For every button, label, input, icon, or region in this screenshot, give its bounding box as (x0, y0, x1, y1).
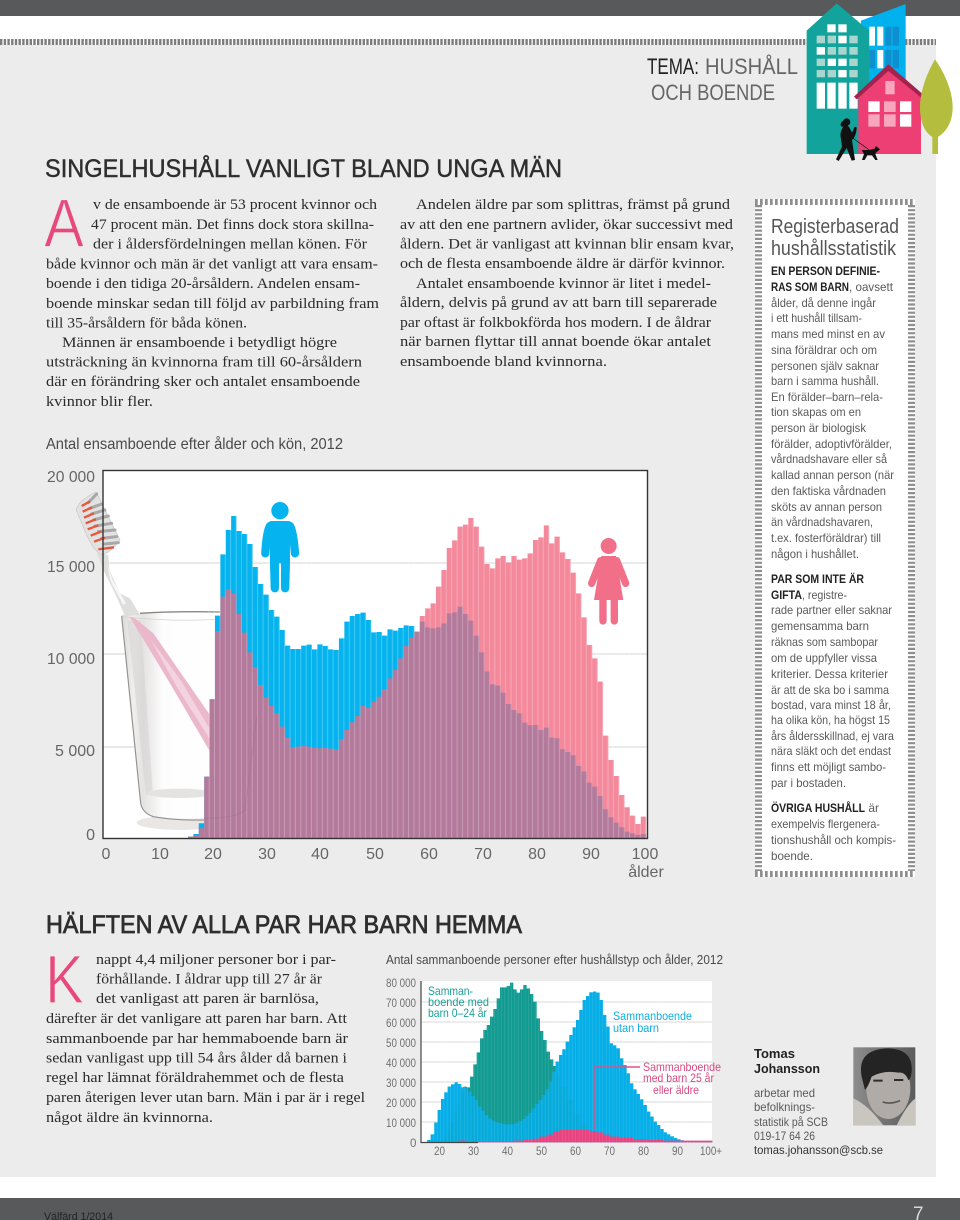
y axis labels: 15 000 (47, 559, 95, 576)
definition: barn: En förälder–barn–rela- (771, 390, 883, 404)
illustration: toothbrush (76, 492, 140, 616)
y axis labels: 5 000 (55, 743, 95, 760)
x axis labels chart 2: 90 (672, 1146, 683, 1158)
x axis labels: 60 (420, 846, 438, 863)
annotation: barn 25 år eller äldre (643, 1060, 721, 1097)
definition: övriga hushåll (771, 801, 896, 863)
author details: tomas.johansson@scb.se (754, 1143, 883, 1157)
definition: barn: någon i hushållet. (771, 547, 859, 561)
definition: par: rade partner eller saknar (771, 603, 892, 617)
footer (44, 1204, 924, 1220)
text block: second article: regel har lämnat föräldrahemmet och de flesta (46, 1070, 344, 1086)
x axis labels chart 2: 60 (570, 1146, 581, 1158)
author name: Tomas (754, 1046, 795, 1061)
panel: Registerbaserad hushållsstatistik (755, 199, 915, 877)
x axis labels chart 2: 20 (434, 1146, 445, 1158)
chart title: ensamboende: Antal ensamboende efter ålder och kön, 2012 (46, 435, 343, 453)
x axis labels: 50 (366, 846, 384, 863)
definition: barn: kallad annan person (när (771, 468, 894, 482)
text block: right column: ensamboende bland kvinnorna. (400, 354, 607, 370)
definition: par: finns ett möjligt sambo- (771, 760, 886, 774)
illustration: houses, tree and woman walking a dog (807, 3, 953, 161)
text block: intro left column: v de ensamboende är 53 procent kvinnor och (93, 197, 378, 213)
series: utan barn (427, 992, 712, 1142)
definition: övriga hushåll: boende. (771, 849, 813, 863)
definition: par: , registre- (802, 588, 847, 602)
definition: par: PAR SOM INTE ÄR (771, 573, 865, 586)
definition: övriga hushåll: exempelvis flergenera- (771, 817, 880, 831)
text block: intro left column: Männen är ensamboende i betydligt högre (62, 335, 337, 351)
text block: intro left column: kvinnor blir fler. (46, 394, 153, 410)
icon: woman with dog (836, 118, 880, 161)
x axis labels chart 2 (434, 1146, 722, 1158)
annotation: utan barn: utan barn (613, 1021, 659, 1035)
text block: intro left column (44, 185, 379, 410)
definition: barn: mans med minst en av (771, 327, 885, 341)
text block: right column: Andelen äldre par som splittras, främst på grund (416, 197, 731, 213)
series: barn 0–24 år (443, 983, 607, 1142)
x axis labels: 100 (632, 846, 658, 863)
definition: par: GIFTA (771, 590, 802, 602)
annotation: barn 0–24 år: Samman- (428, 984, 473, 998)
text block: right column (400, 197, 734, 370)
bars: men blue (188, 516, 414, 838)
definition: barn: t.ex. fosterföräldrar) till (771, 531, 881, 545)
text block: second article: förhållande. I åldrar upp till 27 år är (96, 972, 322, 988)
x axis labels chart 2: 80 (638, 1146, 649, 1158)
y axis labels chart 2: 80 000 (386, 978, 416, 990)
drop cap A: A (44, 185, 84, 262)
author details: 019-17 64 26 (754, 1129, 815, 1143)
x axis labels chart 2: 100+ (700, 1146, 722, 1158)
definition: par: är att de ska bo i samma (771, 683, 889, 697)
text block: intro left column: till 35-årsåldern för båda könen. (46, 316, 247, 332)
definition: barn (771, 266, 894, 561)
author name: Johansson (754, 1061, 820, 1076)
x axis labels: 30 (258, 846, 276, 863)
y axis labels (47, 469, 95, 844)
bars: women pink (414, 518, 646, 838)
definition: barn: personen själv saknar (771, 359, 879, 373)
author details: statistik på SCB (754, 1115, 828, 1129)
y axis labels chart 2: 10 000 (386, 1118, 416, 1130)
annotation: barn 0–24 år: boende med (428, 995, 489, 1009)
definition: övriga hushåll: ÖVRIGA HUSHÅLL (771, 802, 865, 815)
series: barn 25 år eller äldre (458, 1129, 712, 1142)
chart title: sammanboende: Antal sammanboende personer efter hushållstyp och ålder, 2012 (386, 952, 723, 967)
definition: barn: än vårdnadshavaren, (771, 515, 873, 529)
definition: par: par i bostaden. (771, 776, 846, 790)
y axis labels chart 2: 20 000 (386, 1098, 416, 1110)
definition: barn: den faktiska vårdnaden (771, 484, 886, 498)
author details: arbetar med (754, 1086, 815, 1100)
icon: tree (920, 59, 953, 154)
author block (754, 1046, 915, 1157)
x axis labels chart 2: 30 (468, 1146, 479, 1158)
panel title: Registerbaserad (771, 216, 899, 238)
panel title: hushållsstatistik (771, 238, 897, 260)
definition: par: bostad, vara minst 18 år, (771, 698, 891, 712)
text block: second article: paren återigen lever utan barn. Män i par är i regel (46, 1090, 365, 1106)
x axis labels: 90 (582, 846, 600, 863)
definition: barn: RAS SOM BARN (771, 282, 849, 294)
annotation: barn 0–24 år (428, 984, 489, 1020)
x axis labels chart 2: 50 (536, 1146, 547, 1158)
x axis labels: 40 (311, 846, 329, 863)
text block: second article: därefter är det vanligare att paren har barn. Att (46, 1011, 348, 1027)
annotation: barn 25 år eller äldre: Sammanboende (643, 1060, 721, 1074)
y axis labels chart 2 (386, 978, 416, 1150)
annotation: barn 25 år eller äldre: med barn 25 år (643, 1071, 714, 1085)
area bar chart: sammanboende efter hushållstyp och ålder (421, 981, 721, 1142)
section label: Tema: TEMA: (647, 54, 699, 79)
text block: intro left column: der i åldersfördelningen mellan könen. För (93, 236, 367, 252)
definition: barn: EN PERSON DEFINIE- (771, 266, 880, 278)
text block: second article: det vanligast att paren är barnlösa, (96, 991, 319, 1007)
definition: par: års åldersskillnad, ej vara (771, 729, 894, 743)
icon: blue building (861, 4, 906, 83)
definition: barn: sina föräldrar och om (771, 343, 877, 357)
x axis labels chart 2: 70 (604, 1146, 615, 1158)
icon: woman (592, 538, 626, 621)
y axis labels chart 2: 60 000 (386, 1018, 416, 1030)
icon: teal building (807, 3, 869, 154)
author details (754, 1086, 883, 1157)
text block: intro left column: både kvinnor och män är det vanligt att vara ensam- (46, 256, 378, 272)
portrait photo (853, 1047, 915, 1125)
definition: barn: person är biologisk (771, 421, 867, 435)
definition: barn: sköts av annan person (771, 500, 882, 514)
definition: barn: tion skapas om en (771, 405, 861, 419)
definition: par: om de uppfyller vissa (771, 651, 877, 665)
y axis labels: 10 000 (47, 651, 95, 668)
author name (754, 1046, 820, 1076)
text block: intro left column: boende minskar sedan till följd av parbildning fram (46, 296, 379, 312)
text block: right column: och de flesta ensamboende äldre är därför kvinnor. (400, 256, 725, 272)
drop cap K: K (45, 941, 84, 1018)
definition: övriga hushåll: tionshushåll och kompis- (771, 833, 896, 847)
definition: par: nära släkt och det endast (771, 744, 892, 758)
text block: second article (45, 941, 365, 1126)
definition: par: räknas som sambopar (771, 635, 878, 649)
annotation: utan barn (613, 1009, 692, 1035)
section label: Tema (647, 54, 798, 105)
bars: overlap (188, 589, 646, 838)
x axis labels: 20 (204, 846, 222, 863)
panel title (771, 216, 899, 260)
text block: right column: åldern, delvis på grund av att barn till separerade (400, 295, 717, 311)
text block: right column: Antalet ensamboende kvinnor är litet i medel- (416, 276, 711, 292)
x axis labels: 80 (528, 846, 546, 863)
definition: övriga hushåll: är (865, 801, 879, 815)
text block: intro left column: där en förändring sker och antalet ensamboende (46, 374, 360, 390)
icon: pink house (854, 64, 926, 154)
text block: intro left column: utsträckning än kvinnorna fram till 60-årsåldern (46, 354, 363, 370)
y axis labels chart 2: 30 000 (386, 1078, 416, 1090)
annotation: barn 0–24 år: barn 0–24 år (428, 1006, 487, 1020)
definition: par: kriterier. Dessa kriterier (771, 667, 888, 681)
section label: Tema: OCH BOENDE (651, 80, 775, 105)
x axis labels: 70 (474, 846, 492, 863)
annotation: barn 25 år eller äldre: eller äldre (653, 1083, 699, 1097)
x axis labels: 10 (151, 846, 169, 863)
text block: second article: sedan vanligast upp till 54 års ålder då barnen i (46, 1050, 347, 1066)
text block: right column: par oftast är folkbokförda hos modern. I de åldrar (400, 315, 711, 331)
y axis labels chart 2: 50 000 (386, 1038, 416, 1050)
text block: intro left column: boende i den tidiga 20-årsåldern. Andelen ensam- (46, 276, 360, 292)
definition: par: gemensamma barn (771, 619, 869, 633)
text block: right column: av att den ene partnern avlider, ökar successivt med (400, 217, 734, 233)
definition: barn: ålder, då denne ingår (771, 296, 876, 310)
x axis labels (102, 846, 664, 881)
bar chart: ensamboende efter ålder och kön (76, 470, 648, 838)
icon: man (265, 502, 295, 592)
y axis labels chart 2: 0 (410, 1138, 416, 1150)
definition: barn: förälder, adoptivförälder, (771, 437, 892, 451)
x axis labels: 0 (102, 846, 111, 863)
y axis labels chart 2: 40 000 (386, 1058, 416, 1070)
text block: second article: nappt 4,4 miljoner personer bor i par- (96, 952, 336, 968)
author details: befolknings- (754, 1100, 815, 1114)
section label: Tema: HUSHÅLL (705, 54, 798, 79)
y axis labels chart 2: 70 000 (386, 998, 416, 1010)
x axis labels chart 2: 40 (502, 1146, 513, 1158)
y axis labels: 20 000 (47, 469, 95, 486)
text block: second article: något äldre än kvinnorna. (46, 1110, 213, 1126)
text block: right column: när barnen flyttar till annat boende ökar antalet (400, 334, 712, 350)
definition: barn: i ett hushåll tillsam- (771, 311, 862, 325)
heading: Singelhushåll: SINGELHUSHÅLL VANLIGT BLAND UNGA MÄN (45, 153, 562, 183)
text block: intro left column: 47 procent män. Det finns dock stora skillna- (91, 217, 374, 233)
definition: barn: vårdnadshavare eller så (771, 452, 887, 466)
heading: Hälften: HÄLFTEN AV ALLA PAR HAR BARN HEMMA (46, 911, 522, 939)
definition: par: ha olika kön, ha högst 15 (771, 713, 890, 727)
leader line (595, 1067, 640, 1130)
annotation: utan barn: Sammanboende (613, 1009, 692, 1023)
definition: barn: barn i samma hushåll. (771, 374, 879, 388)
text block: second article: sammanboende par har hemmaboende barn är (46, 1031, 348, 1047)
x axis labels: ålder (628, 863, 664, 881)
definition: par (771, 573, 894, 790)
illustration: glass (122, 612, 227, 830)
y axis labels: 0 (86, 827, 95, 844)
definition: barn: , oavsett (849, 280, 894, 294)
text block: right column: åldern. Det är vanligast att kvinnan blir ensam kvar, (400, 236, 734, 252)
